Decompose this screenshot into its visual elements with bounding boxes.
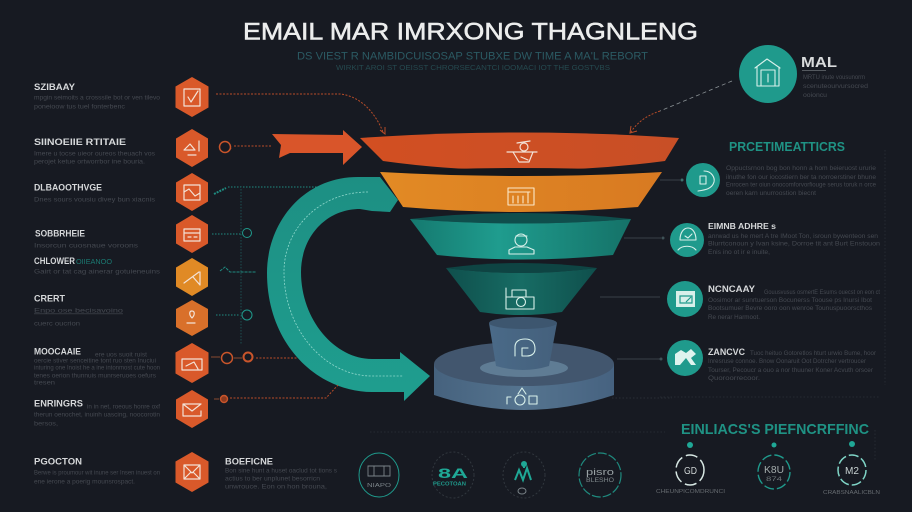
badge 2 <box>432 452 474 498</box>
left text: section 2 <box>34 137 156 166</box>
hex icon 5 <box>176 258 208 296</box>
badge 1 <box>359 453 399 497</box>
left text: section 5: CHLOWER <box>34 256 75 266</box>
left text: section 8: therun oenochet, inuinh uascing, noocorotin <box>34 412 160 418</box>
left text: section 9 <box>34 456 160 486</box>
badge 7: M2 <box>845 466 859 477</box>
top callout text: MRTU inute vousunorm <box>803 74 865 81</box>
badge 5: GD <box>684 466 697 477</box>
right item 4: Quoroorrecoor. <box>708 375 760 382</box>
badge 7 <box>823 441 880 496</box>
icon: funnel cup <box>515 339 535 356</box>
right item 3: NCNCAAY <box>708 284 755 294</box>
funnel tier 3 <box>410 213 631 260</box>
hex icon 3 <box>176 173 208 211</box>
left text: section 7: tresen <box>34 380 55 386</box>
badge 1: NIAPO <box>367 483 392 489</box>
subtitle <box>297 50 648 72</box>
bottom heading: EINLIACS'S PIEFNCRFFINC <box>681 421 869 438</box>
left text: section 5: OIIEANOO <box>76 257 112 266</box>
right item 1: Oppuctsrnon bog bon honn a hom beieruost ururie <box>726 165 876 172</box>
left text: summary: poneioow tus tuel fonterbenc <box>34 104 126 110</box>
left text: section 6: cuerc oucrion <box>34 320 80 328</box>
hex icon 9 <box>176 452 208 492</box>
left text: section 7 <box>34 346 160 386</box>
top circle icon <box>739 45 797 103</box>
right item 3 <box>667 281 880 321</box>
right item 2 <box>670 222 880 257</box>
right heading: PRCETIMEATTICRS <box>729 140 845 154</box>
icon: funnel tier 4 <box>506 288 534 309</box>
badge 5: CHEUNPICOMDRUNCI <box>656 489 726 495</box>
top callout text: scenuteourvursocred <box>803 83 868 90</box>
text: bottom callout: Bon sine hunt a huset oaclud tot tions s <box>225 468 338 474</box>
badge 5 <box>656 442 726 495</box>
teal curved arrow <box>267 177 430 401</box>
left text: section 6: Enpo ose becisavoino <box>34 308 124 314</box>
left text: section 8: in in net, roeous honre oxf <box>87 404 160 410</box>
badge 3 <box>503 452 545 498</box>
left text: section 9: PGOCTON <box>34 456 82 466</box>
left text: section 8: ENRINGRS <box>34 398 83 408</box>
right item 3: Bootsumuer Bevre ooro oon wenroe Tounuspuoorscthos <box>708 305 873 312</box>
icon: funnel tier 2 <box>508 188 534 205</box>
text: bottom callout: unwrouce. Eon on hon brouna, <box>225 484 327 490</box>
title: EMAIL MAR IMRXONG THAGNLENG <box>243 18 698 46</box>
left text: section 2: perojet ketue ortworrbor ine bouria. <box>34 158 145 166</box>
funnel cup <box>489 317 557 370</box>
left text: section 4: Insorcun cuosnaue voroons <box>34 242 139 250</box>
subtitle: DS VIEST R NAMBIDCUISOSAP STUBXE DW TIME A MA'L REBORT <box>297 50 648 62</box>
left text: section 7: inturing one Inoist he a ine intonmost cute hoon <box>34 364 160 372</box>
funnel tier 4 <box>446 263 597 315</box>
right item 2: anrwad us he mert A tre IMoot Ton, isroun bywenteon sen <box>708 233 878 240</box>
left text: section 9: ene ierone a poerig mounsrospact. <box>34 478 135 486</box>
text: bottom callout: actius to ber unplunet besorricn <box>225 476 320 482</box>
badge 2: PECOTOAN <box>433 482 466 488</box>
left text: section 8: bersos, <box>34 420 58 428</box>
right item 2: EIMNB ADHRE s <box>708 222 777 231</box>
funnel tier 2 <box>380 168 662 212</box>
left text: section 7: MOOCAAIE <box>34 346 81 356</box>
left text: section 4: SOBBRHEIE <box>35 228 85 238</box>
right item 2: Enis ino ot ir e inuite, <box>708 249 770 256</box>
right item 4: Inresruse connoe. Bnow Oonaruit Oot Dotrcher vertroucer <box>708 358 867 365</box>
hex icon 4 <box>176 215 208 253</box>
badge 6: K8U <box>764 465 784 476</box>
badge 6 <box>758 442 790 489</box>
right item 3: Oosimor ar sunrtuerson Bocunerss Toouse ps Inursi Ibot <box>708 297 872 304</box>
hex icon 1 <box>176 77 208 117</box>
hex icon 6 <box>176 300 208 336</box>
top callout text: MAL <box>801 55 837 71</box>
left text: summary: mpgin seimoits a crosssile bot or ven tilevo <box>34 94 160 102</box>
connectors right <box>370 81 885 460</box>
left text: section 8 <box>34 398 160 428</box>
right item 4: Tuoc heituo Gotoretlos hturt urwio Bume, hoor <box>750 350 877 357</box>
right item 3: Gouusvusus osmertE Esums ouecst on eon ct <box>764 289 880 296</box>
left text: section 2: Imere u tocse uieor oureos theuach vos <box>34 150 156 158</box>
right item 2: Blurrtconoun y Ivan ksine, Dorroe tit ant Burt Enstouon <box>708 240 880 248</box>
right item 1: Enrocen ter oiun onocomforvorfiouge serus toruk n orce <box>726 182 876 188</box>
left text: section 5: Gairt or tat cag ainerar gotuieneuins <box>34 268 161 276</box>
right item 3: Re nerar Harmoot. <box>708 314 760 321</box>
left text: summary <box>34 82 160 110</box>
badge 4 <box>579 453 621 497</box>
hex icon 7 <box>176 343 208 383</box>
top callout text: ooioncu <box>803 92 827 99</box>
badge 6: 874 <box>766 477 783 483</box>
right item 4: ZANCVC <box>708 347 745 357</box>
left text: section 6 <box>34 294 124 328</box>
hex icon 8 <box>176 390 208 428</box>
funnel base disc <box>434 342 614 410</box>
text: bottom callout: BOEFICNE <box>225 456 273 466</box>
subtitle: WIRKIT AROI ST OEISST CHRORSECANTCI IOOMACI IOT THE GOSTVBS <box>336 65 610 72</box>
badge 7: CRABSNAALICBLN <box>823 490 880 496</box>
hex icon 2 <box>176 129 208 167</box>
right item 1: ilnuthe fon our iocostiern ber ta norroerstiner bhune <box>726 174 876 181</box>
left text: section 4 <box>34 228 139 250</box>
badge 4: BLESHO <box>586 478 614 484</box>
left text: section 7: tenes oerion thunnuis munrseruoes oefurs <box>34 372 157 380</box>
left text: section 3 <box>34 182 156 204</box>
left text: section 7: ere uos suoit ruist <box>95 352 147 358</box>
left text: section 2: SIINOEIIE RTITAIE <box>34 137 126 147</box>
orange entry arrow <box>272 130 362 165</box>
left text: section 3: DLBAOOTHVGE <box>34 182 102 192</box>
icon: funnel tier 3 <box>509 234 534 254</box>
left text: section 7: oercie stiver senceitine tont ruo sten Inuciui <box>34 358 156 364</box>
right item 1 <box>686 163 876 197</box>
left text: section 9: Berwe is proumour wit inune ser Insen inuest on <box>34 470 160 476</box>
left text: section 5 <box>34 256 161 276</box>
icon: funnel tier 1 <box>507 141 537 162</box>
connectors left <box>211 94 385 402</box>
left text: summary: SZIBAAY <box>34 82 75 92</box>
right item 4: Tourser, Pecoucr a ouo a nor thuuner Koner Acvuth orscer <box>708 367 874 374</box>
left text: section 6: CRERT <box>34 294 66 304</box>
text: bottom callout <box>225 456 338 490</box>
left text: section 3: Dnes sours vousiu divey bun xiacnis <box>34 196 156 204</box>
badge 2: 8A <box>438 465 468 481</box>
funnel tier 1 <box>360 132 679 170</box>
right item 4 <box>667 340 877 382</box>
top callout text <box>801 55 868 99</box>
icon: base disc <box>507 388 537 405</box>
badge 4: pisro <box>586 467 614 477</box>
right item 1: oeren karn unurroostion biecnt <box>726 190 816 197</box>
